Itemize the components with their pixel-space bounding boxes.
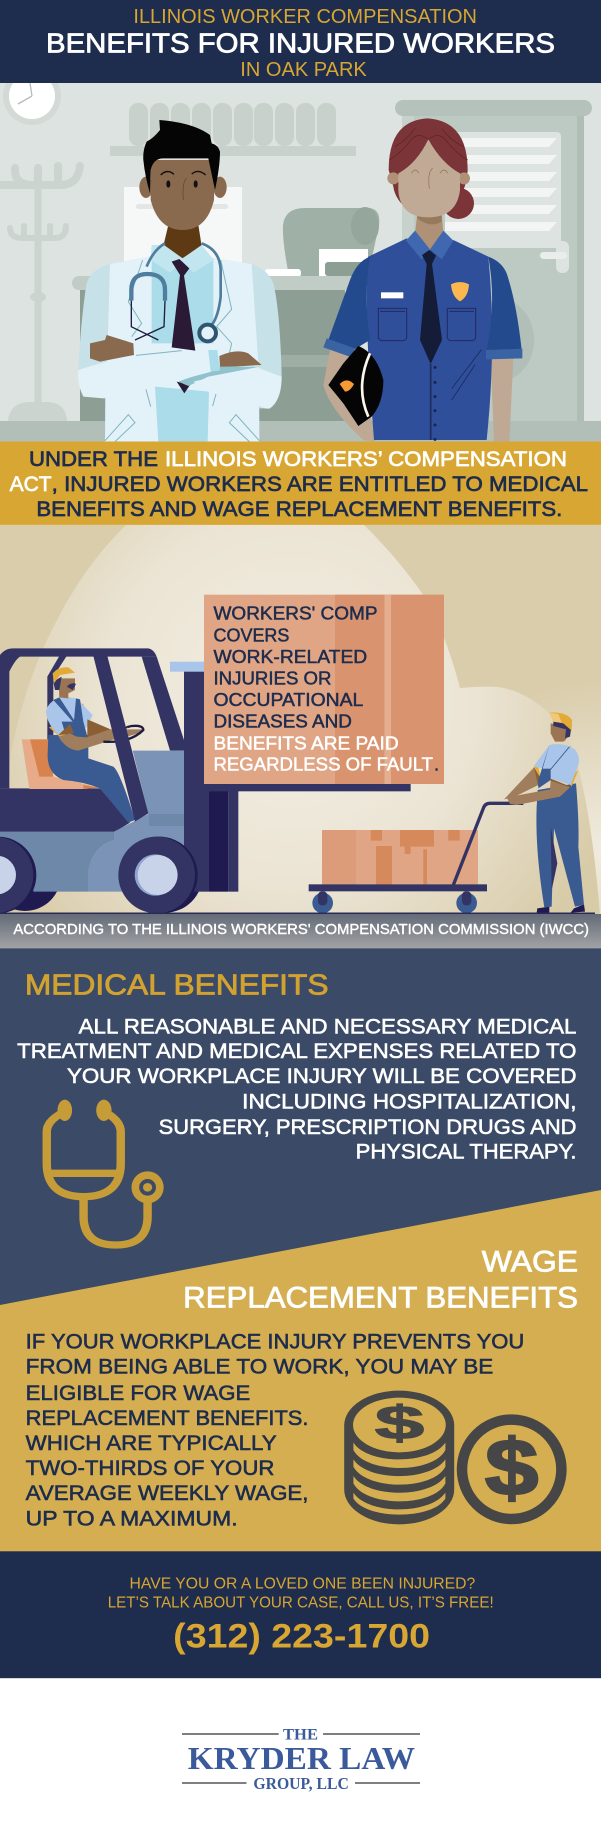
logo: the kryder law group bbox=[0, 1678, 601, 1836]
wage benefits text: TWO-THIRDS OF YOUR bbox=[26, 1455, 274, 1480]
wage benefits text: AVERAGE WEEKLY WAGE, bbox=[26, 1480, 308, 1505]
gold statement band: , INJURED WORKERS ARE ENTITLED TO MEDICAL bbox=[52, 473, 588, 496]
header line 3: IN OAK PARK bbox=[240, 59, 367, 81]
header banner bbox=[0, 0, 601, 83]
icon: stethoscope bbox=[47, 1100, 164, 1245]
gold statement band: BENEFITS AND WAGE REPLACEMENT BENEFITS. bbox=[36, 498, 562, 521]
panel: workers comp box: WORKERS' COMP bbox=[214, 602, 378, 623]
forklift cab frame bbox=[0, 648, 184, 832]
forklift driver bbox=[46, 667, 143, 823]
panel: workers comp box: REGARDLESS OF FAULT bbox=[214, 754, 433, 775]
medical benefits text: SURGERY, PRESCRIPTION DRUGS AND bbox=[159, 1114, 576, 1139]
coat rack bbox=[0, 166, 80, 421]
head bbox=[139, 120, 227, 273]
medical benefits text: INCLUDING HOSPITALIZATION, bbox=[242, 1088, 576, 1113]
gold statement band bbox=[0, 442, 601, 525]
panel: workers comp box: DISEASES AND bbox=[214, 711, 352, 732]
wage benefits text: WHICH ARE TYPICALLY bbox=[26, 1430, 277, 1455]
warehouse scene bbox=[0, 525, 601, 915]
heading: medical benefits: MEDICAL BENEFITS bbox=[25, 969, 329, 1001]
wage benefits text: FROM BEING ABLE TO WORK, YOU MAY BE bbox=[26, 1354, 493, 1379]
panel: workers comp box bbox=[204, 595, 444, 784]
officer cap bbox=[328, 346, 383, 426]
panel: workers comp box: BENEFITS ARE PAID bbox=[214, 732, 399, 753]
door and window bbox=[395, 100, 592, 421]
panel: workers comp box: OCCUPATIONAL bbox=[214, 689, 363, 710]
gold statement band: ACT bbox=[10, 473, 52, 496]
icon: stack of coins: $ bbox=[375, 1397, 424, 1450]
heading: wage replacement benefits: WAGE bbox=[482, 1245, 578, 1278]
cart with boxes bbox=[309, 803, 523, 913]
crossed arms bbox=[78, 335, 282, 409]
main title: BENEFITS FOR INJURED WORKERS bbox=[46, 27, 555, 58]
gold statement band: UNDER THE bbox=[29, 448, 158, 471]
panel: workers comp box: WORK-RELATED bbox=[214, 646, 367, 667]
forklift bbox=[0, 648, 411, 913]
desk and chair bbox=[72, 207, 379, 421]
forklift body bbox=[0, 656, 209, 892]
medical benefits text: ALL REASONABLE AND NECESSARY MEDICAL bbox=[79, 1013, 576, 1038]
wage benefits text: UP TO A MAXIMUM. bbox=[26, 1506, 238, 1531]
icon: stack of coins bbox=[344, 1391, 454, 1524]
medical benefits text: YOUR WORKPLACE INJURY WILL BE COVERED bbox=[67, 1063, 576, 1088]
header line 1: ILLINOIS WORKER COMPENSATION bbox=[133, 6, 477, 28]
phone number: (312) 223-1700 bbox=[173, 1618, 430, 1656]
floor bbox=[0, 421, 601, 442]
icon: wall clock bbox=[3, 83, 61, 125]
forklift mast and fork bbox=[0, 662, 411, 913]
medical benefits text: TREATMENT AND MEDICAL EXPENSES RELATED TO bbox=[17, 1038, 576, 1063]
call to action text: HAVE YOU OR A LOVED ONE BEEN INJURED? bbox=[130, 1575, 475, 1592]
arms bbox=[323, 343, 513, 442]
logo: the kryder law group: GROUP, LLC bbox=[253, 1774, 349, 1793]
panel: call to action bbox=[0, 1551, 601, 1678]
wage benefits text: REPLACEMENT BENEFITS. bbox=[26, 1405, 308, 1430]
wage benefits text: ELIGIBLE FOR WAGE bbox=[26, 1380, 250, 1405]
source strip: ACCORDING TO THE ILLINOIS WORKERS' COMPENSATION COMMISSION (IWCC) bbox=[13, 922, 589, 938]
ground line bbox=[0, 912, 595, 914]
medical benefits text: PHYSICAL THERAPY. bbox=[356, 1139, 576, 1164]
worker pushing cart bbox=[504, 713, 585, 913]
wall paper bbox=[124, 187, 242, 267]
hair back and neck bbox=[389, 118, 474, 250]
lab coat bbox=[78, 257, 282, 442]
face bbox=[387, 128, 470, 217]
call to action text: LET’S TALK ABOUT YOUR CASE, CALL US, IT’S FREE! bbox=[108, 1594, 494, 1611]
icon: single coin bbox=[462, 1420, 561, 1519]
panel: workers comp box: . bbox=[434, 754, 439, 775]
panel: workers comp box: COVERS bbox=[214, 625, 289, 646]
doctor figure bbox=[78, 120, 282, 442]
call to action text bbox=[108, 1575, 494, 1611]
panel: wage replacement benefits bbox=[0, 1190, 601, 1552]
illustration: office with doctor and officer bbox=[0, 67, 601, 442]
source strip bbox=[0, 914, 601, 948]
wage benefits text bbox=[26, 1329, 524, 1531]
medical benefits text bbox=[17, 1013, 576, 1164]
forklift wheels bbox=[0, 837, 198, 913]
stethoscope bbox=[131, 243, 221, 341]
heading: wage replacement benefits bbox=[183, 1245, 578, 1314]
forklift seat bbox=[22, 739, 100, 789]
uniform shirt bbox=[323, 231, 522, 441]
wage benefits text: IF YOUR WORKPLACE INJURY PREVENTS YOU bbox=[26, 1329, 524, 1354]
logo: the kryder law group: KRYDER LAW bbox=[188, 1740, 415, 1776]
gold statement band: ILLINOIS WORKERS’ COMPENSATION bbox=[165, 448, 567, 471]
icon: single coin: $ bbox=[485, 1423, 538, 1512]
heading: wage replacement benefits: REPLACEMENT BENEFITS bbox=[183, 1281, 578, 1314]
officer figure bbox=[323, 118, 522, 442]
cart and worker bbox=[309, 713, 585, 913]
panel: medical benefits bbox=[0, 948, 601, 1305]
background arch and hill bbox=[5, 525, 600, 915]
shelf with binders bbox=[110, 103, 356, 156]
panel: workers comp box: INJURIES OR bbox=[214, 668, 332, 689]
necktie bbox=[172, 259, 195, 393]
logo: the kryder law group: THE bbox=[283, 1726, 318, 1743]
